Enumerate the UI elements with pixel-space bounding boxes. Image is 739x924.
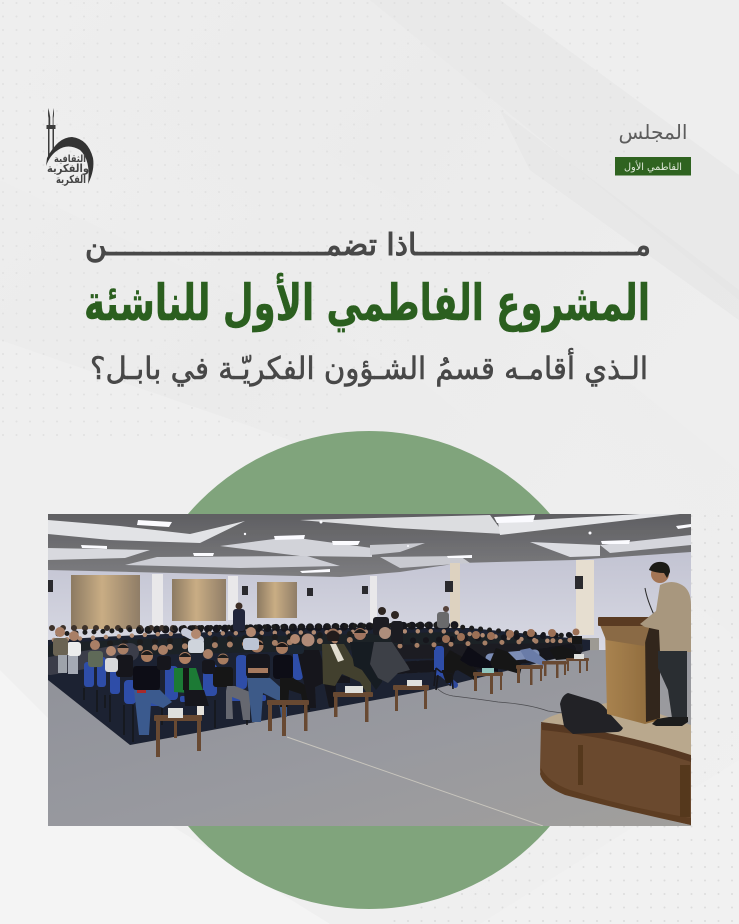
floor [48, 650, 691, 826]
stage top [542, 700, 691, 756]
green label [615, 157, 691, 176]
trousers [658, 651, 687, 718]
ceiling lights [81, 515, 691, 573]
shoes [652, 717, 688, 726]
icon: dome [46, 137, 93, 184]
audience: back rows [48, 625, 590, 745]
stage front [540, 724, 691, 825]
podium [598, 617, 660, 724]
ceiling [48, 514, 691, 577]
logo calligraphy [47, 154, 89, 186]
floor monitor speaker [560, 693, 623, 734]
tissue boxes [168, 654, 584, 718]
green circle [130, 431, 608, 909]
logo [46, 108, 93, 186]
chair legs [84, 674, 453, 742]
brand word: المجلس [618, 120, 688, 144]
front row: boy in black and jeans [133, 650, 172, 735]
brand: council name [615, 120, 691, 176]
front row: boy with folded arms [246, 640, 287, 722]
wall lower panels [582, 638, 599, 650]
shirt [640, 582, 691, 652]
stage [540, 700, 691, 825]
front row: boy in grey trousers [213, 654, 250, 720]
right-hand seated rows [434, 628, 582, 686]
speaker [640, 562, 691, 726]
mid-row boys [53, 627, 304, 677]
wall speakers [48, 576, 583, 596]
heading line 1: مـــــــــــــــــــــــــاذا تضمـــــــــــــــــــــــــن [85, 228, 651, 263]
logo calligraphy: والفكرية [47, 162, 89, 175]
curtains [71, 575, 297, 629]
front row: boy with green scarf [174, 652, 209, 715]
subtitle: الـذي أقامـه قسمُ الشـؤون الفكريّـة في بابـل؟ [90, 348, 648, 387]
head [651, 571, 669, 583]
label text: الفاطمي الأول [624, 160, 682, 173]
blue chairs [84, 646, 444, 706]
logo calligraphy: الثقافية [54, 154, 86, 165]
microphone [644, 588, 654, 614]
coffee tables [154, 654, 589, 757]
floor seam [287, 737, 543, 826]
photo: seminar hall [48, 514, 691, 826]
standing photographers [233, 602, 449, 634]
icon: minaret [46, 108, 56, 157]
wall pillars [152, 560, 594, 635]
front row: second boy [273, 642, 310, 710]
back wall [48, 552, 691, 650]
front row: men in suits [297, 627, 410, 708]
cable [437, 688, 562, 714]
logo calligraphy: الفكرية [56, 173, 86, 186]
